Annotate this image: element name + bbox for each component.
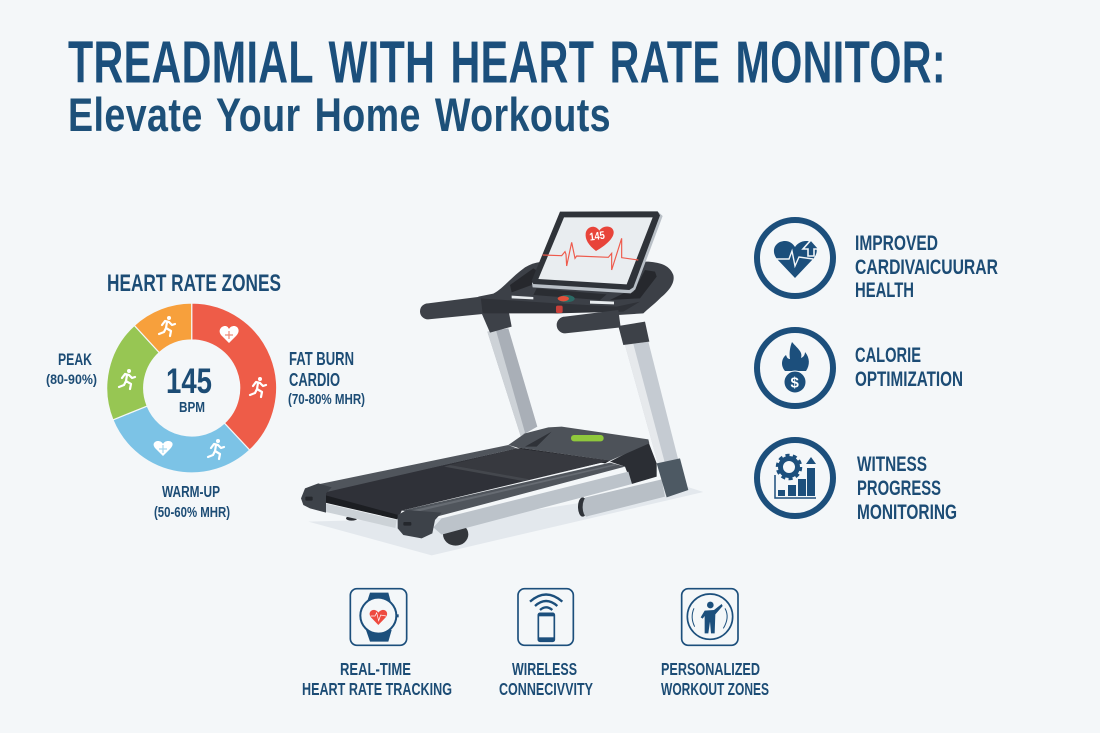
label: REAL-TIME (340, 659, 411, 679)
feature: personalized zones (661, 589, 769, 699)
left upright (482, 309, 537, 436)
label: fat burn cardio (288, 349, 365, 408)
side panel (433, 472, 632, 535)
screen (532, 211, 663, 293)
title (68, 30, 946, 141)
center value: 145 (166, 362, 212, 401)
label: peak: (80-90%) (46, 371, 97, 387)
panel: features (302, 589, 769, 699)
label: PROGRESS (857, 476, 941, 500)
label: peak: PEAK (58, 350, 93, 369)
benefit: witness progress monitoring (757, 440, 957, 524)
label (302, 659, 452, 699)
panel: benefits (757, 220, 998, 524)
icon: flame and coin: $ (790, 374, 800, 392)
label: MONITORING (857, 500, 957, 524)
label (855, 343, 963, 391)
label: HEART RATE TRACKING (302, 679, 452, 699)
heart with reading (586, 227, 614, 251)
ecg line (543, 238, 638, 270)
feature: wireless connectivity (499, 589, 593, 699)
label: WORKOUT ZONES (661, 679, 769, 699)
floor shadow (308, 487, 703, 555)
icon: runner orange (159, 316, 175, 336)
icon: heart red zone (220, 326, 239, 343)
center value (166, 362, 212, 416)
label (661, 659, 769, 699)
console (478, 262, 674, 315)
feature: real-time tracking (302, 589, 452, 699)
label: warm-up: (50-60% MHR) (154, 504, 230, 521)
label: WIRELESS (512, 659, 577, 679)
label: CALORIE (855, 343, 921, 367)
icon: phone with wifi (518, 589, 573, 645)
label (499, 659, 593, 699)
center value: BPM (179, 400, 205, 416)
treadmill illustration (301, 211, 703, 555)
icon: heart blue zone (154, 441, 173, 456)
handlebars (420, 297, 621, 333)
rear roller (324, 503, 397, 528)
donut chart (107, 303, 277, 473)
label: IMPROVED (855, 231, 938, 255)
label: fat burn cardio: FAT BURN (289, 349, 354, 369)
label: warm-up: WARM-UP (162, 484, 220, 501)
label: CONNECIVVITY (499, 679, 593, 699)
label (857, 452, 957, 524)
lower side rail (578, 458, 688, 517)
label: HEALTH (855, 278, 914, 302)
icon: runner green (119, 369, 135, 389)
label: peak (46, 350, 97, 387)
label: PERSONALIZED (661, 659, 760, 679)
wheel (443, 523, 468, 546)
label: fat burn cardio: (70-80% MHR) (288, 392, 365, 408)
label: CARDIVAICUURAR (855, 255, 998, 279)
icon: gear and bars (757, 440, 833, 516)
icon: smartwatch (350, 589, 407, 645)
belt rails (301, 445, 625, 538)
icon: runner blue (208, 439, 224, 459)
icon: flame and coin (757, 330, 833, 406)
label (855, 231, 998, 302)
label: WITNESS (857, 452, 927, 476)
label: OPTIMIZATION (855, 367, 963, 391)
icon: heart (757, 220, 833, 296)
panel: heart rate zones (46, 270, 365, 521)
benefit: calorie optimization (757, 330, 963, 406)
icon: person in circle (682, 589, 738, 645)
running belt (324, 448, 610, 519)
label: warm-up (154, 484, 230, 521)
icon: runner red (250, 377, 266, 397)
label: fat burn cardio: CARDIO (289, 370, 340, 390)
benefit: cardiovascular health (757, 220, 998, 302)
green pad (571, 435, 604, 441)
motor cover (508, 427, 657, 484)
heading: heart rate zones: HEART RATE ZONES (107, 270, 281, 297)
right upright (618, 322, 678, 465)
screen: 145 (589, 230, 606, 244)
title: Elevate Your Home Workouts (68, 88, 611, 141)
